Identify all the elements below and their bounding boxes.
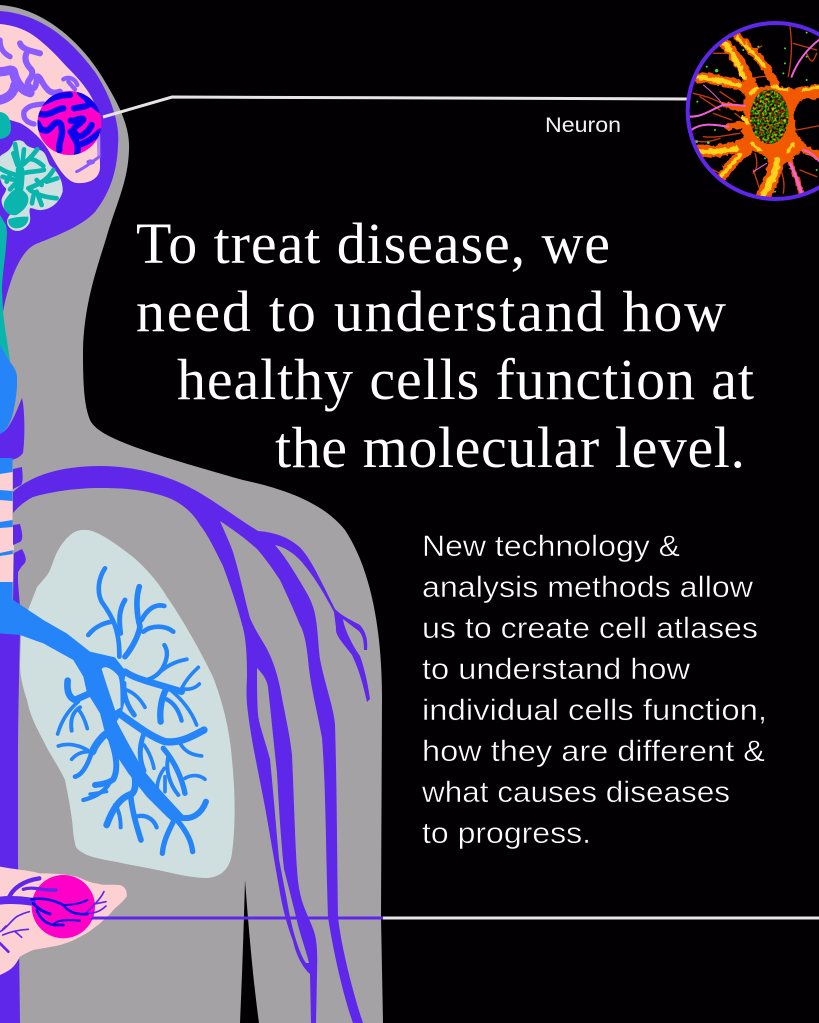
cerebellum	[0, 140, 63, 231]
arm blood vessels	[13, 466, 370, 1023]
bronchial tree	[0, 568, 206, 853]
pancreas shape	[0, 867, 127, 975]
lung	[20, 530, 235, 878]
neuron label: Neuron	[545, 113, 621, 137]
orange limbs	[695, 35, 819, 198]
cerebellum lower lobes	[4, 189, 28, 215]
human body silhouette	[0, 5, 383, 1023]
cartilage rings	[0, 472, 14, 582]
dendrites	[690, 27, 819, 198]
dark ducts in circle	[32, 899, 87, 925]
neuron connector line	[103, 97, 690, 117]
soma orange area	[742, 84, 819, 163]
bottom connector line: white section	[383, 916, 819, 920]
main bronchus	[0, 600, 183, 822]
neuron micrograph	[688, 23, 819, 199]
spinal cord	[0, 215, 10, 362]
body paragraph: New technology &	[422, 530, 680, 563]
gap in bronchus	[102, 667, 121, 711]
throat muscle	[0, 398, 24, 462]
airway upper	[0, 345, 17, 435]
head: purple cavity	[0, 11, 118, 312]
body paragraph: us to create cell atlases	[422, 612, 758, 645]
cell body	[750, 89, 789, 144]
magenta fibres	[690, 37, 819, 193]
side ribs	[13, 467, 26, 607]
main heading: healthy cells function at	[177, 347, 754, 412]
scattered green dots	[695, 32, 818, 193]
trachea	[0, 458, 26, 608]
throat	[0, 345, 24, 462]
pancreas	[0, 867, 127, 975]
cortex folds	[0, 40, 99, 172]
micrograph background	[688, 23, 819, 199]
bottom connector line: purple section	[92, 916, 383, 920]
body paragraph: what causes diseases	[421, 776, 730, 809]
main heading: the molecular level.	[275, 415, 745, 480]
cerebellum outline	[0, 140, 63, 231]
body paragraph: to progress.	[422, 817, 591, 850]
cerebellum branches	[0, 144, 57, 205]
body paragraph: individual cells function,	[422, 694, 767, 727]
brain highlight circle	[38, 91, 102, 155]
main heading: To treat disease, we	[136, 211, 610, 276]
brain cortex	[0, 24, 100, 183]
fine red fibres	[693, 27, 819, 193]
body paragraph: analysis methods allow	[422, 571, 754, 604]
trachea tube	[0, 458, 12, 608]
micrograph ring	[688, 23, 819, 199]
yellow highlights	[697, 37, 819, 195]
body paragraph: how they are different &	[422, 735, 765, 768]
highlighted cortex folds	[38, 93, 100, 155]
brain stem blob	[0, 112, 11, 139]
airway branches	[58, 568, 206, 853]
spine vessel	[0, 630, 20, 1023]
body paragraph: to understand how	[422, 653, 691, 686]
main heading: need to understand how	[136, 279, 726, 344]
body paragraph	[421, 530, 767, 850]
pancreas highlight circle	[32, 875, 95, 938]
pancreas connector start	[91, 918, 93, 920]
main heading	[136, 211, 754, 480]
brain	[0, 24, 102, 183]
purple ducts	[0, 878, 106, 952]
